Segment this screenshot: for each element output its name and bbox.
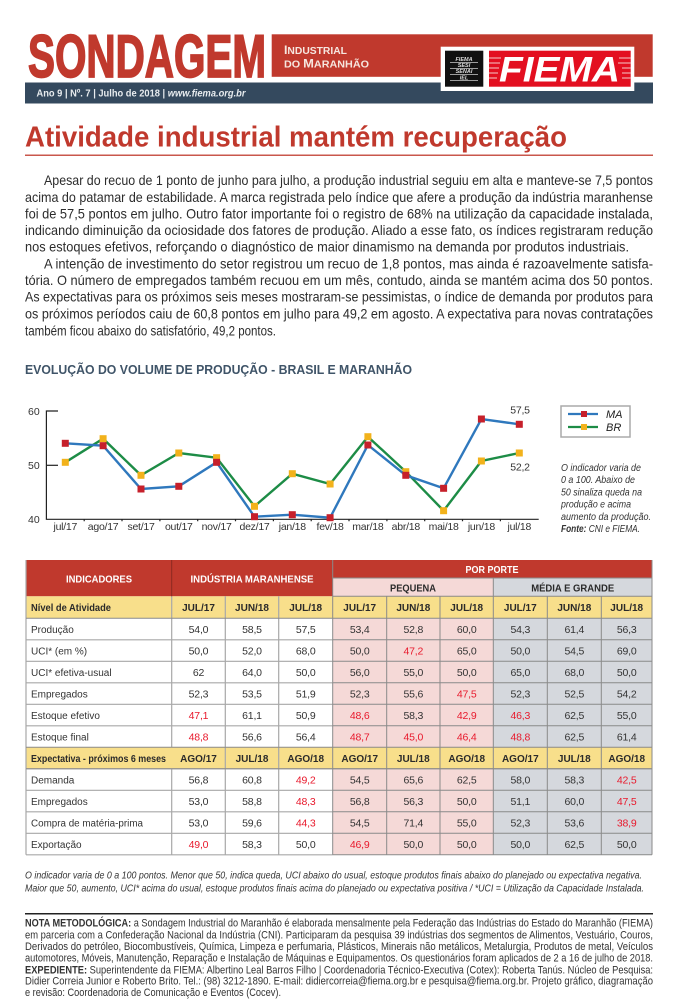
row: Estoque efetivo: 47,1 [189, 710, 209, 722]
row: Demanda: 54,5 [350, 774, 370, 786]
row: Demanda: 49,2 [296, 774, 316, 786]
row: Empregados expectativa [31, 796, 637, 808]
row: Estoque final: 56,4 [296, 732, 316, 744]
row: Exportação: Exportação [31, 840, 82, 851]
logo: FIEMA: IEL [460, 76, 469, 82]
line chart: dez/17 [239, 521, 270, 533]
row: Compra de matéria-prima: 44,3 [296, 818, 316, 830]
subtitle: DO MARANHÃO [284, 56, 369, 70]
logo: FIEMA: FIEMA [499, 50, 620, 90]
row: Empregados: 54,2 [617, 688, 637, 700]
row: UCI em %: 50,0 [510, 646, 530, 658]
row: Demanda: 42,5 [617, 774, 637, 786]
row: Empregados: 47,5 [457, 688, 477, 700]
row: Nível de Atividade: JUL/17 [504, 603, 537, 614]
row: Compra de matéria-prima: Compra de matéria-prima [31, 818, 143, 830]
issue bar [25, 82, 653, 104]
row: Produção: 56,3 [617, 624, 637, 636]
row: Compra de matéria-prima: 38,9 [617, 818, 637, 830]
row: UCI efetiva-usual: 62 [193, 667, 204, 679]
masthead [25, 23, 653, 104]
row: Demanda: 58,0 [510, 774, 530, 786]
row: Estoque final: 48,7 [350, 732, 370, 744]
row: UCI em %: UCI* (em %) [31, 646, 87, 658]
chart note: 50 sinaliza queda na [561, 488, 642, 498]
row: Exportação: 50,0 [617, 839, 637, 851]
row: Empregados expectativa: 47,5 [617, 796, 637, 808]
table header: INDICADORES [66, 574, 132, 586]
data labels: 52,2 [510, 462, 530, 474]
row: Empregados [31, 688, 637, 700]
line chart: abr/18 [392, 521, 420, 533]
row: UCI em %: 68,0 [296, 646, 316, 658]
row: Exportação: 46,9 [350, 839, 370, 851]
row: Compra de matéria-prima [31, 818, 637, 830]
line chart: 50 [28, 460, 40, 472]
row: UCI efetiva-usual [31, 667, 637, 679]
row: Empregados: 52,3 [189, 688, 209, 700]
row: Estoque efetivo: 62,5 [564, 710, 584, 722]
table header: PEQUENA [390, 582, 436, 594]
chart note: 0 a 100. Abaixo de [561, 475, 635, 486]
row: Empregados expectativa: Empregados [31, 797, 88, 808]
row: Expectativa: JUL/18 [397, 754, 430, 765]
line chart: jan/18 [278, 521, 306, 533]
row: Produção: 61,4 [564, 624, 584, 636]
table header [66, 564, 614, 594]
row: Empregados: Empregados [31, 690, 88, 700]
row: Compra de matéria-prima: 54,5 [350, 818, 370, 830]
row: Compra de matéria-prima: 52,3 [510, 818, 530, 830]
series: BR [62, 433, 523, 514]
data labels: 57,5 [510, 404, 530, 416]
row: Estoque final: 56,6 [242, 732, 262, 744]
row: Estoque final [31, 732, 637, 744]
row: Empregados expectativa: 56,3 [403, 796, 423, 808]
line chart: set/17 [127, 521, 155, 533]
row: UCI em %: 50,0 [350, 646, 370, 658]
row: Exportação: 50,0 [510, 839, 530, 851]
logo: FIEMA: FIEMA [455, 57, 473, 63]
row: UCI em %: 47,2 [403, 646, 423, 658]
row: Estoque final: 48,8 [510, 732, 530, 744]
row: Estoque final: 61,4 [617, 732, 637, 744]
chart note: produção e acima [560, 500, 631, 510]
row: Estoque efetivo [31, 710, 637, 722]
row: Empregados expectativa: 48,3 [296, 796, 316, 808]
row: Estoque efetivo: 55,0 [617, 710, 637, 722]
row: Demanda: 56,8 [189, 774, 209, 786]
table header: INDÚSTRIA MARANHENSE [190, 572, 314, 586]
row: Produção: 57,5 [296, 624, 316, 636]
row: Empregados: 55,6 [403, 688, 423, 700]
row: Empregados: 53,5 [242, 688, 262, 700]
row: Demanda [31, 774, 637, 786]
row: UCI em %: 54,5 [564, 646, 584, 658]
line chart: nov/17 [202, 521, 232, 533]
line chart: mar/18 [352, 521, 384, 533]
row: Estoque final: 45,0 [403, 732, 423, 744]
body text: nos estoques efetivos, reforçando o diagnóstico de maior dinamismo na demanda por produtos industriais. [25, 238, 629, 254]
subtitle: INDUSTRIAL [284, 43, 347, 57]
row: Nível de Atividade: JUL/18 [289, 603, 323, 614]
heading: Atividade industrial mantém recuperação [25, 122, 567, 154]
series: MA [62, 416, 523, 521]
row: Estoque efetivo: 46,3 [510, 710, 530, 722]
row: Exportação: 58,3 [242, 839, 262, 851]
row: Nível de Atividade: Nível de Atividade [31, 603, 111, 614]
row: Expectativa: AGO/17 [180, 754, 217, 765]
row: UCI em %: 65,0 [457, 646, 477, 658]
line chart: 60 [28, 406, 40, 418]
row: Expectativa: JUL/18 [236, 754, 269, 765]
line chart: ago/17 [88, 521, 119, 533]
row: Estoque final: 62,5 [564, 732, 584, 744]
row: Produção: 60,0 [457, 624, 477, 636]
row: Empregados: 52,3 [510, 688, 530, 700]
row: Nível de Atividade [31, 603, 644, 614]
row: Estoque final: 46,4 [457, 732, 477, 744]
row: Compra de matéria-prima: 55,0 [457, 818, 477, 830]
row: Produção: 58,5 [242, 624, 262, 636]
chart note [560, 463, 651, 535]
row: UCI efetiva-usual: 64,0 [242, 667, 262, 679]
line chart: jul/17 [52, 521, 78, 533]
row: Expectativa: AGO/18 [287, 754, 324, 765]
row: Nível de Atividade: JUN/18 [396, 603, 431, 614]
row: Nível de Atividade: JUN/18 [235, 603, 269, 614]
row: Nível de Atividade: JUL/18 [450, 603, 484, 614]
chart note: O indicador varia de [561, 463, 641, 474]
body text: também ficou abaixo do satisfatório, 49,2 pontos. [25, 322, 276, 338]
line chart: jun/18 [467, 521, 495, 533]
row: UCI efetiva-usual: 65,0 [510, 667, 530, 679]
row: UCI efetiva-usual: 50,0 [457, 667, 477, 679]
row: Nível de Atividade: JUN/18 [557, 603, 592, 614]
chart legend: MA [606, 409, 622, 421]
data table [26, 560, 652, 855]
row: Exportação: 62,5 [564, 839, 584, 851]
logo: FIEMA: SESI [458, 63, 471, 69]
methodological note [25, 916, 653, 999]
row: Compra de matéria-prima: 53,6 [564, 818, 584, 830]
row: Produção: 53,4 [350, 624, 370, 636]
data labels [510, 404, 530, 474]
logo: FIEMA: SENAI [456, 69, 473, 75]
row: Demanda: 58,3 [564, 774, 584, 786]
row: Expectativa: JUL/18 [558, 754, 591, 765]
row: Exportação: 49,0 [189, 839, 209, 851]
row: UCI efetiva-usual: 68,0 [564, 667, 584, 679]
row: Estoque efetivo: 58,3 [403, 710, 423, 722]
row: UCI em %: 69,0 [617, 646, 637, 658]
row: Estoque final: Estoque final [31, 732, 89, 744]
row: Expectativa [31, 754, 645, 765]
row: Empregados: 52,5 [564, 688, 584, 700]
chart heading: EVOLUÇÃO DO VOLUME DE PRODUÇÃO - BRASIL E MARANHÃO [25, 362, 412, 377]
row: Empregados expectativa: 58,8 [242, 796, 262, 808]
row: Compra de matéria-prima: 59,6 [242, 818, 262, 830]
row: Empregados expectativa: 53,0 [189, 796, 209, 808]
row: Estoque efetivo: 61,1 [242, 710, 262, 722]
row: Nível de Atividade: JUL/17 [182, 603, 215, 614]
row: Exportação: 50,0 [457, 839, 477, 851]
chart note: aumento da produção. [561, 512, 651, 523]
row: Compra de matéria-prima: 71,4 [403, 818, 423, 830]
row: Empregados expectativa: 56,8 [350, 796, 370, 808]
table footnote [25, 870, 644, 894]
table header: POR PORTE [466, 564, 518, 576]
row: Nível de Atividade: JUL/17 [343, 603, 377, 614]
row: Estoque efetivo: Estoque efetivo [31, 711, 100, 722]
chart legend [561, 406, 630, 437]
row: Estoque efetivo: 50,9 [296, 710, 316, 722]
row: Exportação [31, 839, 637, 851]
row: Estoque efetivo: 48,6 [350, 710, 370, 722]
row: UCI efetiva-usual: 55,0 [403, 667, 423, 679]
row: Exportação: 50,0 [296, 839, 316, 851]
row: Demanda: 62,5 [457, 774, 477, 786]
chart note: Fonte: CNI e FIEMA. [561, 524, 640, 535]
line chart: mai/18 [429, 521, 459, 533]
row: Produção: 54,3 [510, 624, 530, 636]
row: UCI em %: 52,0 [242, 646, 262, 658]
row: Produção [31, 624, 637, 636]
row: UCI efetiva-usual: 56,0 [350, 667, 370, 679]
row: UCI em %: 50,0 [189, 646, 209, 658]
row: Empregados expectativa: 60,0 [564, 796, 584, 808]
row: Empregados: 51,9 [296, 688, 316, 700]
row: Demanda: 65,6 [403, 774, 423, 786]
row: Expectativa: AGO/17 [341, 754, 378, 765]
issue text: Ano 9 | Nº. 7 | Julho de 2018 | www.fiema.org.br [36, 88, 247, 100]
table backgrounds [26, 560, 652, 855]
row: UCI efetiva-usual: UCI* efetiva-usual [31, 668, 112, 679]
chart legend: BR [606, 422, 621, 434]
body text [25, 172, 653, 338]
row: Expectativa: AGO/18 [608, 754, 645, 765]
table header: MÉDIA E GRANDE [531, 582, 614, 594]
row: Empregados expectativa: 51,1 [510, 796, 530, 808]
line chart: 40 [28, 514, 40, 526]
subtitle [284, 43, 369, 70]
row: Compra de matéria-prima: 53,0 [189, 818, 209, 830]
row: Empregados: 52,3 [350, 688, 370, 700]
row: Produção: 54,0 [189, 624, 209, 636]
row: UCI em % [31, 646, 637, 658]
row: Demanda: 60,8 [242, 774, 262, 786]
red band [272, 34, 653, 77]
row: Nível de Atividade: JUL/18 [610, 603, 644, 614]
row: Produção: Produção [31, 625, 74, 636]
title: SONDAGEM: SONDAGEM [28, 23, 266, 90]
row: Expectativa: AGO/18 [448, 754, 485, 765]
line chart: jul/18 [506, 521, 532, 533]
row: Exportação: 50,0 [403, 839, 423, 851]
line chart [28, 404, 539, 533]
row: Estoque final: 48,8 [189, 732, 209, 744]
line chart: fev/18 [317, 521, 344, 533]
row: Expectativa: Expectativa - próximos 6 meses [31, 754, 166, 765]
row: Expectativa: AGO/17 [502, 754, 539, 765]
row: Empregados expectativa: 50,0 [457, 796, 477, 808]
row: Demanda: Demanda [31, 776, 75, 786]
table grid [26, 560, 652, 855]
methodological note: e revisão: Coordenadoria de Comunicação e Eventos (Cocev). [25, 987, 281, 999]
line chart: out/17 [165, 521, 193, 533]
row: Produção: 52,8 [403, 624, 423, 636]
logo: FIEMA [441, 47, 634, 91]
row: UCI efetiva-usual: 50,0 [296, 667, 316, 679]
row: Estoque efetivo: 42,9 [457, 710, 477, 722]
row: UCI efetiva-usual: 50,0 [617, 667, 637, 679]
